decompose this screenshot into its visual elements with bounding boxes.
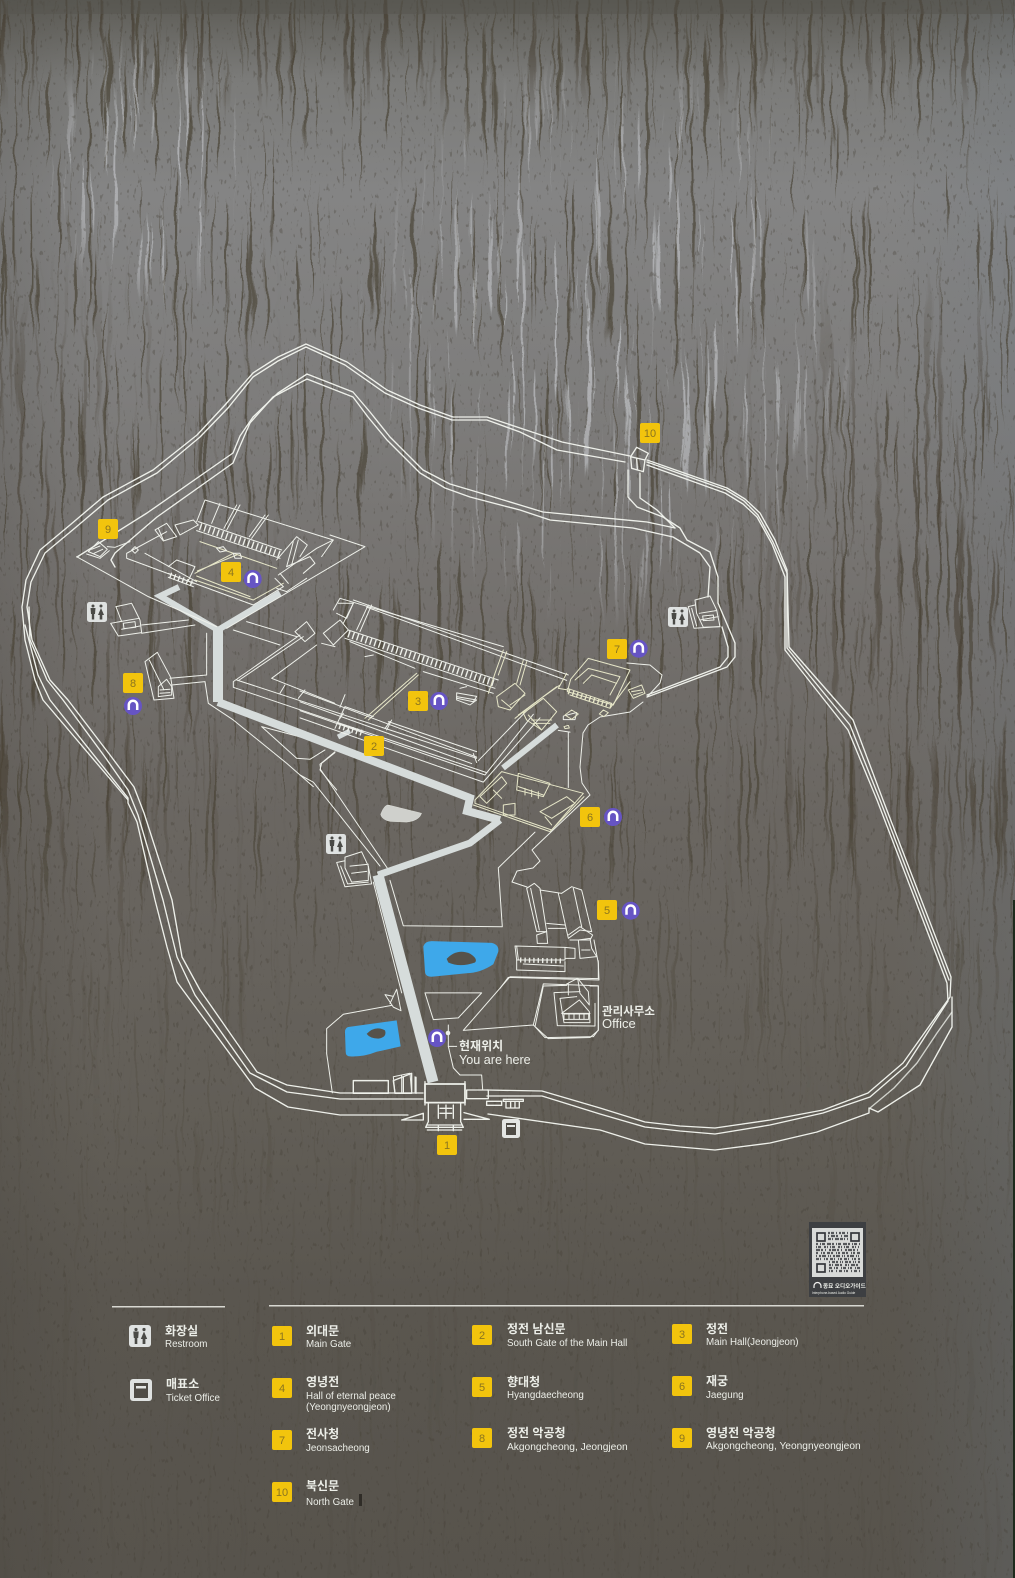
marker: Yeongnyeongjeon Akgongcheong 9: 9: [105, 524, 111, 536]
marker: Main gate 1: [437, 1135, 457, 1155]
legend: restroom: Restroom: [165, 1339, 207, 1350]
marker: North gate 10: [640, 423, 660, 443]
marker: Jeongjeon 3: [408, 691, 448, 711]
legend item 5: 5: [479, 1382, 485, 1394]
marker: Hyangdaecheong 5: 5: [604, 905, 610, 917]
marker: Yeongnyeongjeon 4: [221, 562, 262, 588]
legend item 6: [672, 1373, 744, 1401]
you are here marker: 현재위치: [459, 1038, 503, 1053]
marker: Yeongnyeongjeon Akgongcheong 9: [98, 519, 118, 539]
legend item 3: [672, 1322, 799, 1348]
office label: Office: [602, 1016, 636, 1031]
legend item 1: Main Gate: [306, 1339, 352, 1350]
marker: South gate 2: [364, 736, 384, 756]
legend item 3: Main Hall(Jeongjeon): [706, 1337, 799, 1348]
legend item 1: [272, 1323, 352, 1350]
marker: Hyangdaecheong 5: [597, 900, 640, 920]
building complex: Yeongnyeongjeon: [77, 500, 365, 628]
legend item 6: 6: [679, 1381, 685, 1393]
legend item 8: 8: [479, 1433, 485, 1445]
legend: ticket office: 매표소: [166, 1376, 199, 1391]
marker: Jeonsacheong 7: 7: [614, 644, 620, 656]
QR code panel: Interphone-based Audio Guide: [812, 1291, 855, 1295]
ponds: [345, 805, 498, 1057]
legend item 4: 4: [279, 1383, 285, 1395]
legend item 2: 2: [479, 1330, 485, 1342]
legend item 2: 정전 남신문: [507, 1322, 566, 1336]
marker: Jeongjeon 3: 3: [415, 696, 421, 708]
legend item 5: [472, 1374, 584, 1401]
icon: ticket office on map: [502, 1119, 520, 1138]
legend item 8: 정전 악공청: [507, 1425, 566, 1440]
main walkways: [160, 587, 557, 1082]
legend divider right: [269, 1305, 864, 1306]
you are here marker: [428, 1029, 531, 1067]
marker: Jaegung 6: [580, 807, 622, 827]
marker: Jeongjeon Akgongcheong 8: 8: [130, 678, 136, 690]
building: north gate: [631, 447, 648, 472]
legend item 10: North Gate: [306, 1497, 354, 1508]
legend item 6: Jaegung: [706, 1390, 744, 1401]
you are here marker: You are here: [459, 1053, 531, 1067]
building: restroom east: [688, 596, 720, 628]
QR code panel: [809, 1222, 866, 1297]
marker: Yeongnyeongjeon 4: 4: [228, 567, 234, 579]
legend item 7: [272, 1426, 370, 1454]
legend item 10: 북신문: [306, 1479, 339, 1493]
legend item 8: [472, 1425, 628, 1453]
ground paths and plots: [142, 620, 662, 1093]
legend item 4: 영녕전: [306, 1375, 339, 1389]
legend item 7: 7: [279, 1435, 285, 1447]
legend item 3: 정전: [706, 1322, 728, 1336]
marker: Main gate 1: 1: [444, 1140, 450, 1152]
building: restroom south: [337, 852, 372, 887]
legend divider left: [112, 1306, 225, 1308]
legend item 9: Akgongcheong, Yeongnyeongjeon: [706, 1441, 861, 1452]
legend item 6: 재궁: [706, 1373, 728, 1388]
icon: restroom west: [87, 602, 107, 622]
office label: [602, 1005, 655, 1031]
building: main gate: [353, 1073, 523, 1131]
legend item 9: 9: [679, 1433, 685, 1445]
marker: North gate 10: 10: [644, 428, 656, 440]
legend item 10: 10: [276, 1487, 288, 1499]
icon: restroom east: [668, 607, 688, 627]
QR code panel: 종묘 오디오가이드: [823, 1282, 866, 1290]
legend: restroom: 화장실: [165, 1323, 198, 1338]
marker: South gate 2: 2: [371, 741, 377, 753]
building: Jaegung: [473, 772, 584, 832]
marker: Jeonsacheong 7: [607, 639, 648, 659]
legend item 1: 1: [279, 1331, 285, 1343]
office label: 관리사무소: [602, 1005, 655, 1018]
marker: Jeongjeon Akgongcheong 8: [123, 673, 143, 715]
legend item 2: South Gate of the Main Hall: [507, 1338, 627, 1349]
legend item 4: [272, 1375, 396, 1413]
legend: ticket office: [130, 1376, 220, 1404]
building: Akgongcheong Yeongnyeongjeon: [87, 542, 130, 558]
legend item 9: [672, 1425, 861, 1452]
icon: restroom south: [326, 834, 346, 854]
legend item 3: 3: [679, 1329, 685, 1341]
building: Hyangdaecheong: [500, 883, 599, 988]
legend item 10: [272, 1479, 362, 1508]
building: restroom west: [111, 603, 142, 636]
legend: ticket office: Ticket Office: [166, 1393, 220, 1404]
legend item 4: Hall of eternal peace: [306, 1391, 396, 1402]
building: Jeonsacheong: [564, 658, 645, 729]
building complex: Jeongjeon main hall: [233, 598, 577, 782]
legend item 5: Hyangdaecheong: [507, 1390, 584, 1401]
legend item 7: 전사청: [306, 1426, 339, 1441]
legend item 1: 외대문: [306, 1323, 339, 1338]
legend item 8: Akgongcheong, Jeongjeon: [507, 1442, 628, 1453]
legend item 9: 영녕전 악공청: [706, 1425, 776, 1440]
legend item 4: (Yeongnyeongjeon): [306, 1402, 391, 1413]
legend: restroom: [129, 1323, 207, 1350]
legend item 5: 향대청: [507, 1374, 540, 1389]
building: office: [535, 978, 598, 1038]
marker: Jaegung 6: 6: [587, 812, 593, 824]
palace wall outline: [22, 344, 952, 1150]
building: Akgongcheong Jeongjeon: [145, 652, 174, 700]
legend item 2: [472, 1322, 627, 1349]
legend item 7: Jeonsacheong: [306, 1443, 370, 1454]
